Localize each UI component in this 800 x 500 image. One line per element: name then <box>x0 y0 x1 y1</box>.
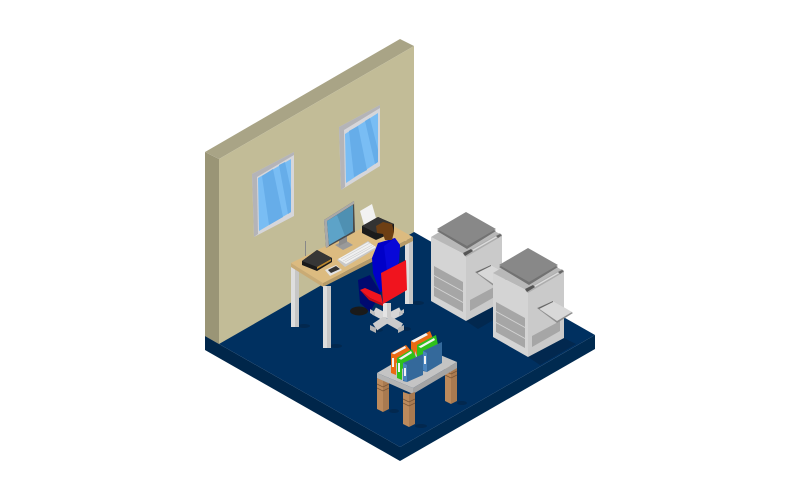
keyboard <box>337 241 377 267</box>
copier right-hand back machine <box>431 212 514 329</box>
room floor slab <box>205 224 595 461</box>
binders on the table <box>391 331 442 382</box>
copier front machine <box>493 248 576 365</box>
red office chair <box>360 260 411 333</box>
person sitting at the desk <box>350 222 400 316</box>
computer monitor <box>324 201 355 250</box>
back wall <box>205 39 414 344</box>
window right <box>339 105 380 190</box>
side table <box>377 347 467 428</box>
printer and paper <box>360 204 394 240</box>
window left <box>252 152 294 237</box>
router <box>302 241 332 271</box>
smartphone <box>325 265 342 276</box>
office desk <box>291 219 424 348</box>
